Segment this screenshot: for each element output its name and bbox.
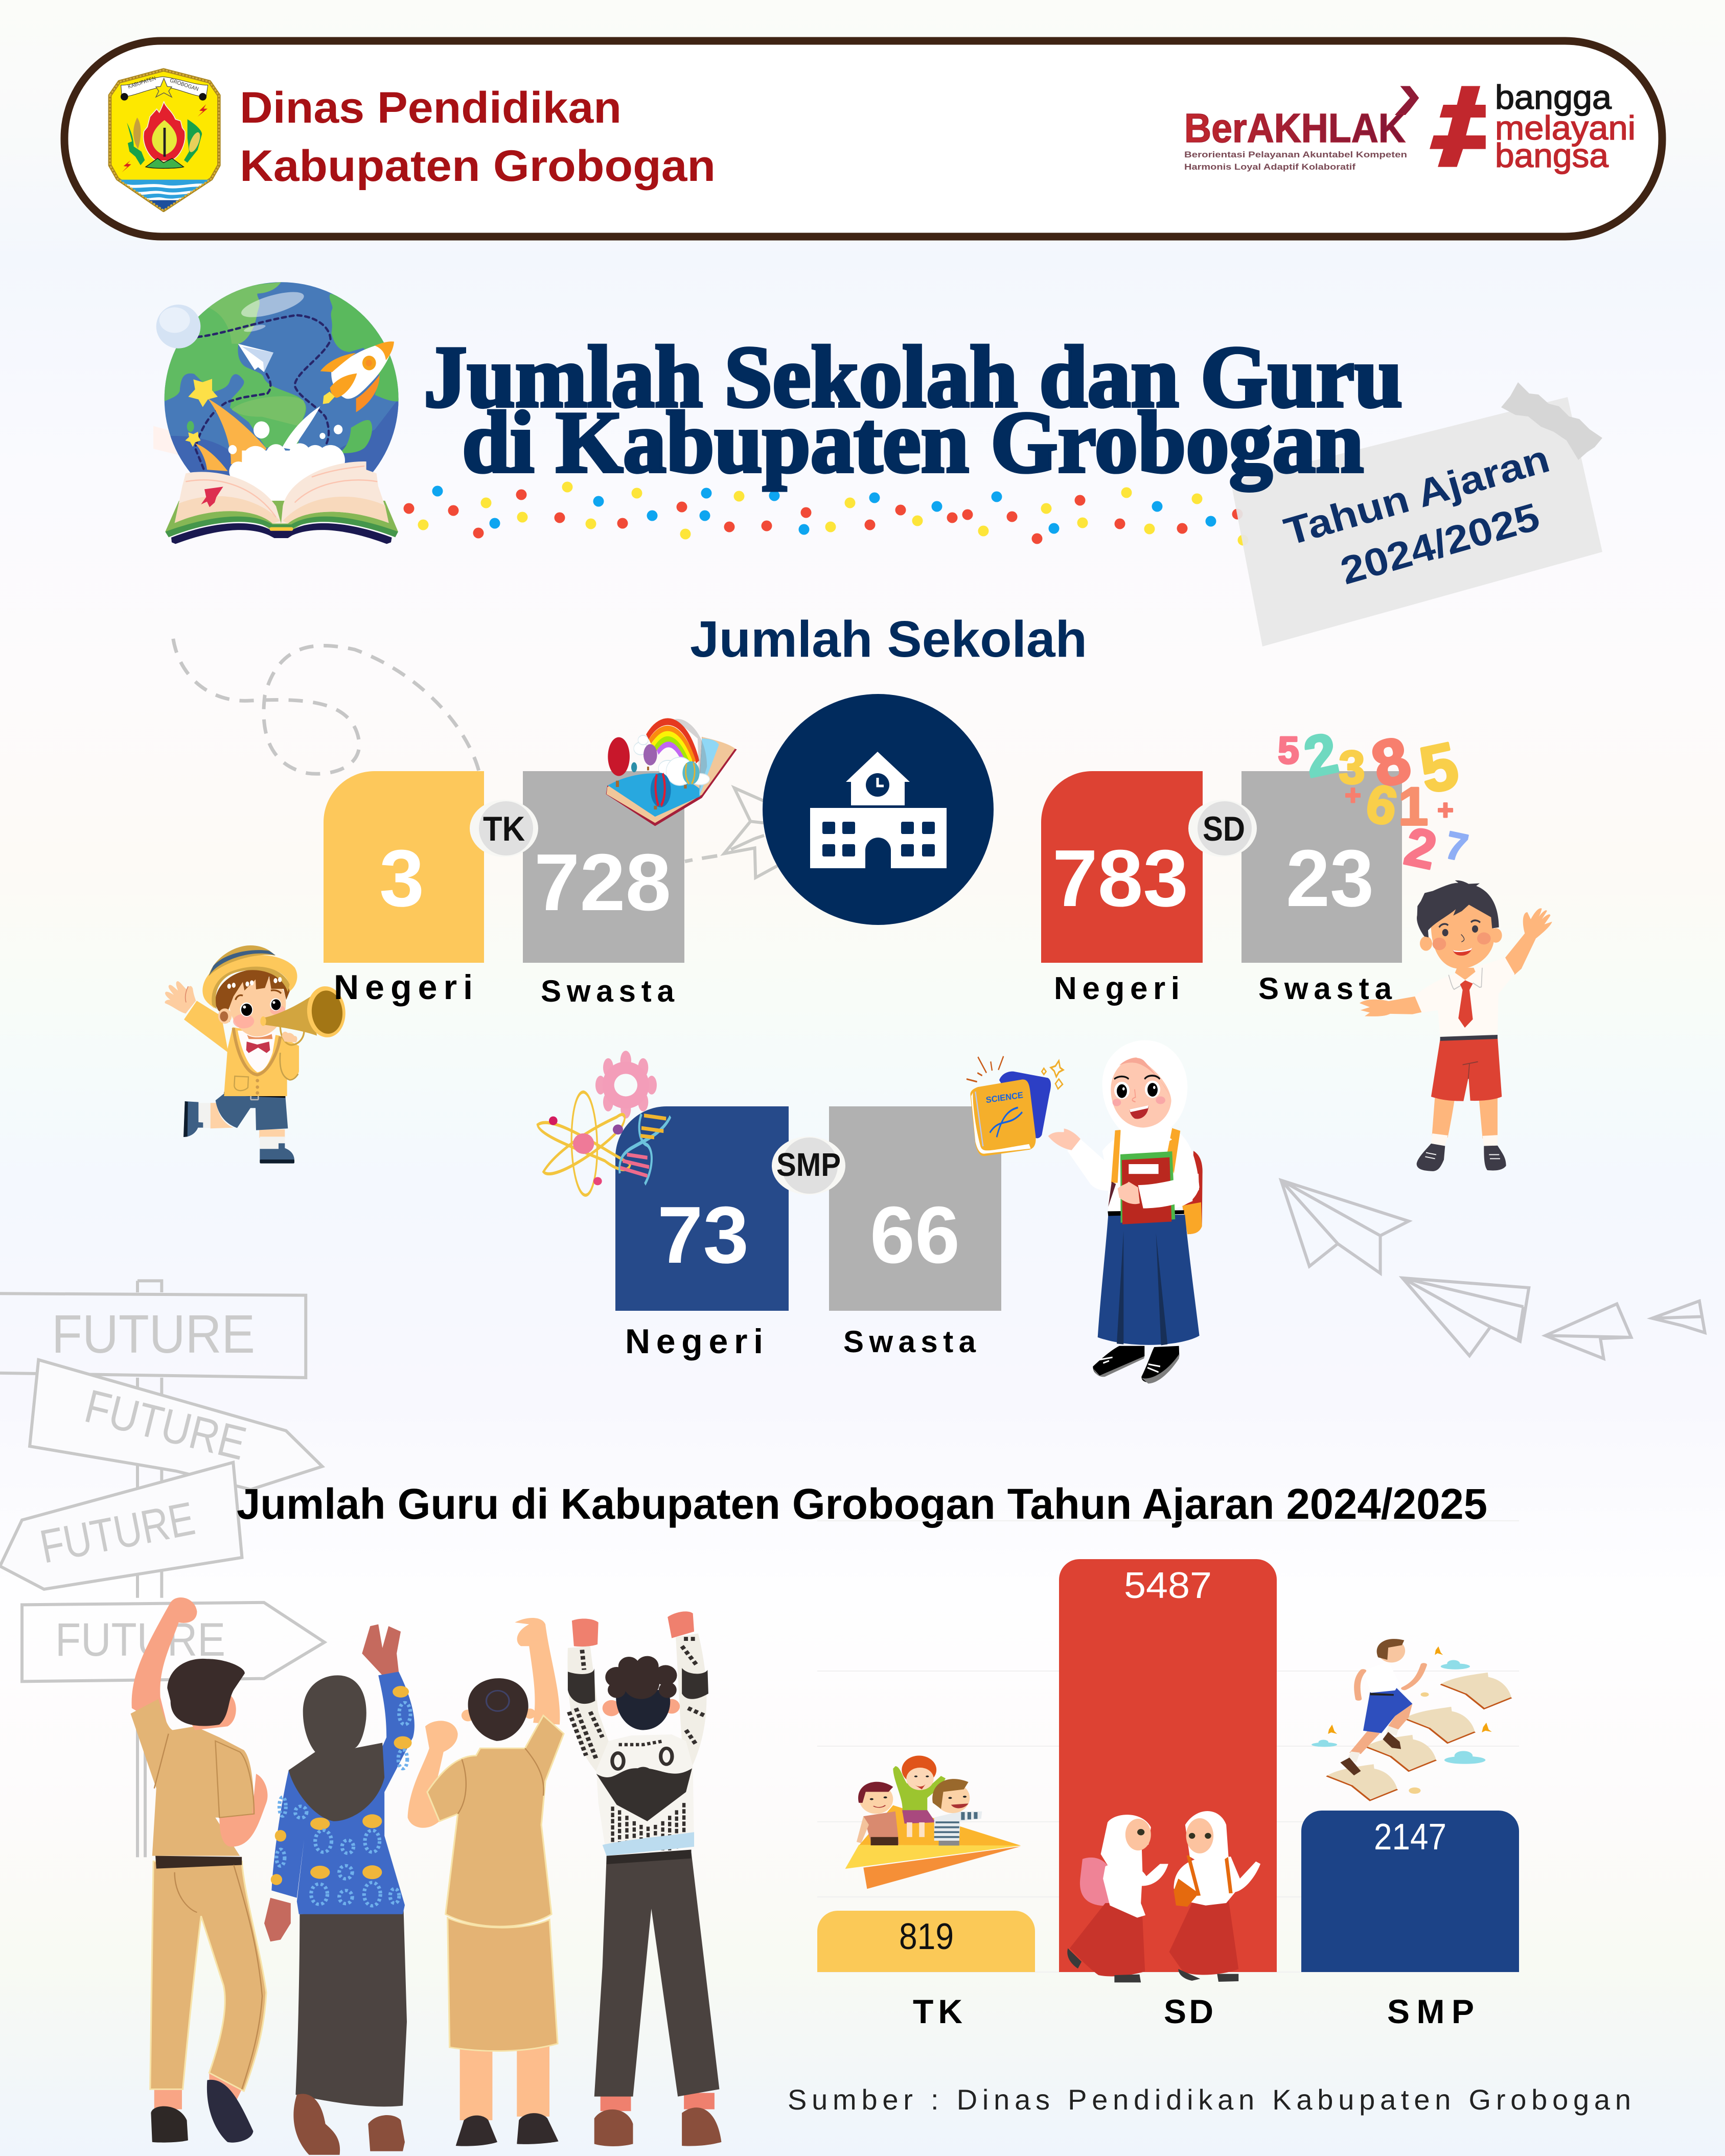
decorative signpost: future — [0, 1281, 325, 1857]
illustration: teachers — [131, 1597, 721, 2155]
teacher 1 — [131, 1597, 268, 2143]
value: 819: 819 — [899, 1916, 954, 1957]
panel: SMP — [615, 1106, 1001, 1311]
main title — [424, 329, 1402, 491]
bar: TK Negeri — [324, 771, 484, 963]
bar: SMP Negeri — [615, 1106, 789, 1311]
main title: Jumlah Sekolah dan Guru — [424, 329, 1402, 426]
illustration: SMP girl — [1048, 1040, 1203, 1383]
bottom book — [1327, 1764, 1397, 1800]
school labels — [334, 968, 1392, 1361]
bar chart: jumlah guru — [817, 1521, 1519, 2030]
decorative paper plane by school icon — [685, 788, 778, 878]
badge: SMP — [772, 1137, 845, 1195]
value: 3: 3 — [379, 833, 424, 923]
panel: SD — [1041, 771, 1402, 963]
illustration: numbers: 7 — [1442, 823, 1471, 869]
teacher 3 — [408, 1618, 564, 2146]
label: SD Negeri: Negeri — [1054, 971, 1180, 1006]
logo: bangga melayani bangsa — [1430, 78, 1636, 174]
logo: bangga melayani bangsa: bangsa — [1495, 136, 1608, 174]
label: TK Swasta: Swasta — [541, 974, 675, 1008]
main title: di Kabupaten Grobogan — [462, 394, 1364, 491]
icon: school circle — [763, 694, 994, 925]
logo: bangga melayani bangsa: bangga — [1495, 78, 1612, 116]
icon: Grobogan emblem: GROBOGAN — [169, 77, 199, 92]
source note: Sumber : Dinas Pendidikan Kabupaten Grobogan — [788, 2083, 1631, 2116]
value: 2147: 2147 — [1374, 1817, 1446, 1858]
logo: BerAKHLAK: Berorientasi Pelayanan Akuntabel Kompeten — [1184, 150, 1407, 159]
illustration: numbers: 2 — [1400, 816, 1441, 881]
illustration: numbers: 3 — [1339, 741, 1365, 794]
badge: SMP: SMP — [776, 1146, 841, 1183]
axis label: SMP: SMP — [1387, 1992, 1474, 2030]
badge: SD: SD — [1203, 809, 1245, 848]
illustration: numbers: + — [1437, 795, 1454, 825]
illustration: numbers: 5 — [1414, 728, 1464, 807]
logo: BerAKHLAK: Harmonis Loyal Adaptif Kolaboratif — [1184, 162, 1355, 172]
value: 783: 783 — [1052, 833, 1188, 923]
illustration: globe and open book — [153, 282, 400, 544]
decorative signpost: future: FUTURE — [36, 1492, 199, 1573]
value: 73: 73 — [657, 1190, 749, 1280]
decorative signpost: future: FUTURE — [55, 1614, 225, 1666]
label: SD Swasta: Swasta — [1258, 971, 1392, 1006]
illustration: TK boy with megaphone — [165, 945, 348, 1164]
note text: 2024/2025: 2024/2025 — [1336, 495, 1544, 593]
illustration: atom, gear and DNA — [538, 1051, 671, 1196]
value: 23: 23 — [1286, 833, 1374, 923]
value: 728: 728 — [534, 838, 671, 928]
badge: SD — [1188, 800, 1257, 857]
value: 5487: 5487 — [1124, 1565, 1212, 1606]
illustration: science book: SCIENCE — [985, 1090, 1024, 1105]
illustration: numbers: 6 — [1361, 773, 1402, 838]
illustration: numbers: 2 — [1299, 721, 1343, 790]
logo: bangga melayani bangsa: melayani — [1495, 109, 1636, 147]
badge: TK — [470, 800, 538, 857]
value: 66: 66 — [870, 1190, 960, 1280]
badge: TK: TK — [483, 809, 525, 848]
decorative signpost: future: FUTURE — [52, 1304, 255, 1364]
second book — [1365, 1735, 1436, 1771]
illustration: numbers: 1 — [1398, 777, 1428, 837]
heading: Jumlah Sekolah: Jumlah Sekolah — [690, 611, 1087, 668]
third book — [1404, 1707, 1475, 1743]
label: SMP Swasta: Swasta — [843, 1325, 976, 1359]
decorative signpost: future: FUTURE — [80, 1380, 251, 1470]
teacher 4 — [567, 1611, 721, 2146]
illustration: numbers: 8 — [1365, 723, 1417, 801]
axis label: TK: TK — [913, 1992, 962, 2030]
illustration: rainbow pop-up book — [606, 719, 737, 826]
bar: TK — [817, 1911, 1035, 1972]
illustration: boy on books — [1312, 1639, 1511, 1800]
illustration: SD girls — [1067, 1811, 1260, 1982]
bar: SD Swasta — [1241, 771, 1402, 963]
header title: Kabupaten Grobogan: Kabupaten Grobogan — [240, 142, 716, 191]
icon: Grobogan emblem — [107, 70, 223, 214]
illustration: science book — [967, 1056, 1063, 1156]
heading: Jumlah Guru: Jumlah Guru di Kabupaten Grobogan Tahun Ajaran 2024/2025 — [237, 1480, 1487, 1528]
label: SMP Negeri: Negeri — [625, 1322, 763, 1361]
logo: BerAKHLAK: BerAKHLAK — [1184, 105, 1406, 151]
decorative dashed route — [173, 639, 479, 774]
illustration: kids on paper plane — [845, 1756, 1021, 1889]
illustration: numbers: + — [1345, 780, 1361, 810]
illustration: SD boy — [1360, 880, 1552, 1171]
panel: TK — [324, 771, 684, 963]
teacher 2 — [264, 1624, 415, 2155]
decorative paper planes — [1281, 1180, 1705, 1359]
note text: Tahun Ajaran: Tahun Ajaran — [1279, 437, 1554, 554]
bar: SD Negeri — [1041, 771, 1203, 963]
illustration: numbers: 5 — [1278, 729, 1299, 772]
grid lines — [817, 1521, 1519, 1972]
bar: SD — [1059, 1559, 1277, 1972]
header panel — [64, 41, 1662, 237]
logo: BerAKHLAK — [1184, 86, 1419, 172]
bar: SMP — [1301, 1811, 1519, 1972]
icon: Grobogan emblem: KABUPATEN — [127, 75, 156, 90]
illustration: numbers — [1278, 721, 1471, 881]
bar: SMP Swasta — [829, 1106, 1001, 1311]
fourth book — [1441, 1673, 1511, 1709]
confetti dots — [404, 481, 1248, 546]
axis label: SD: SD — [1164, 1992, 1213, 2030]
header title: Dinas Pendidikan: Dinas Pendidikan — [240, 83, 622, 132]
label: TK Negeri: Negeri — [334, 968, 473, 1007]
bar: TK Swasta — [523, 771, 684, 963]
sticky note: tahun ajaran — [1231, 382, 1602, 646]
tape on note — [1501, 382, 1602, 460]
